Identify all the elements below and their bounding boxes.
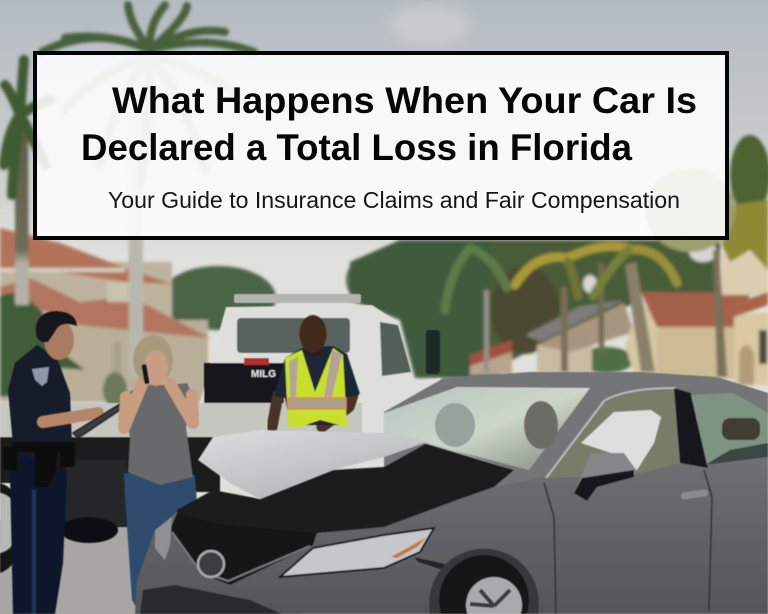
car roof and upper body [384,372,768,614]
rear dual tyre [60,517,118,543]
road [0,520,300,614]
chrome grille trim [172,532,310,581]
rear window [237,318,350,353]
truck mirror [426,330,440,374]
side mirror [574,453,636,501]
officer shirt [8,345,72,445]
officer head [44,320,74,360]
worker head [300,315,326,353]
rear seat headrest [722,418,760,440]
woman left arm [124,382,143,428]
engine bay [177,443,514,533]
lower grille [140,585,282,614]
bent hood [198,430,514,499]
tow truck [0,294,446,573]
bush left [0,292,85,397]
front side window [547,390,680,478]
middle houses [470,300,634,375]
subtitle: Your Guide to Insurance Claims and Fair Compensation [108,187,680,213]
hi-vis vest [285,348,347,427]
front tyre [439,555,529,614]
background: neighbourhood and palms [0,5,768,408]
person: police officer [3,311,123,614]
bumper strip [414,557,454,573]
woman jeans [124,473,197,613]
palm crown: centre top [42,5,254,185]
chrome window trim [546,388,676,478]
wheel arch [429,549,539,614]
windshield [384,387,590,470]
phone [141,364,150,384]
toyota emblem [198,551,224,577]
truck lettering: MILG [251,369,276,380]
light bar [234,294,361,303]
worker neck [305,345,321,355]
title panel [35,53,727,238]
officer trousers [10,453,67,614]
chassis [0,437,220,527]
seats seen through windshield [435,403,475,447]
side window [380,322,411,376]
worker arms [272,395,353,427]
front wheel [0,483,21,573]
officer badge patch [32,367,49,386]
title line 2: Declared a Total Loss in Florida [81,127,632,168]
right headlight [280,528,434,577]
palm crown: right [645,135,768,270]
person: woman on phone [122,335,197,613]
trees behind truck [160,240,720,378]
officer hair [36,311,77,342]
black back panel [204,363,284,403]
woman hair [133,335,173,385]
house right [625,253,768,385]
woman shirt [122,383,195,485]
background: clouds [390,5,470,45]
yellow palm fronds [445,246,677,310]
house left [0,228,210,408]
damaged car [135,372,768,614]
palm trunks [15,60,727,378]
palm crown: left [4,60,50,195]
alloy wheel [466,577,522,614]
grille and front fascia [170,513,317,585]
vest vertical stripes [289,357,298,397]
woman face [144,350,168,386]
vest reflective band [288,398,346,409]
person: tow truck worker [272,315,360,427]
deployed airbag [581,410,661,470]
tail lamp [244,358,269,365]
door pillar [674,388,708,468]
rear side window [691,393,768,465]
flatbed deck [0,403,362,438]
officer forearm [43,413,98,422]
car main body [135,452,768,614]
woman right arm [170,384,193,423]
left headlight [155,517,172,560]
door seams and handle [544,470,712,614]
officer duty belt and holster [3,442,75,487]
truck cab [200,305,446,470]
worker shirt [274,346,360,425]
title line 1: What Happens When Your Car Is [112,80,697,121]
clipboard [73,404,123,438]
